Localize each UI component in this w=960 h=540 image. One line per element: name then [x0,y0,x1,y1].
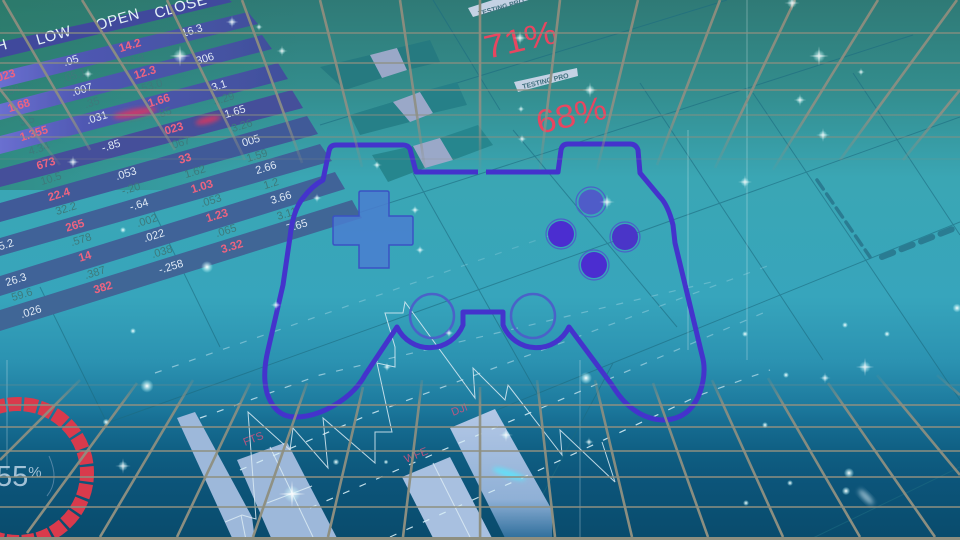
panel: top progress bars [320,40,493,182]
white values: 3.66 [269,189,293,207]
white values: .022 [142,227,166,245]
red values: 14.2 [118,37,143,55]
dim values: .065 [214,222,238,240]
dim values: .002 [135,212,159,230]
bar highlight [492,465,526,483]
d-pad [333,191,413,268]
dim values: 3.5 [18,113,36,129]
table header: LOW [34,22,74,49]
gauge inner arc [47,456,54,496]
dim values: 1.59 [245,147,269,165]
dim values: 53.0 [140,77,164,95]
table rows [0,0,362,331]
dim values: 3.29 [212,90,236,108]
bar 1 [177,412,255,540]
red values: 1.68 [7,97,32,115]
button top [576,187,606,217]
bar 3 [402,457,492,538]
chart: zigzag line [225,302,615,540]
table header [0,0,209,55]
white values: -.258 [157,258,185,277]
red values: 1.03 [190,178,215,196]
white values: 3.1 [210,78,228,94]
progress bar 1 [320,40,440,90]
dim values: .038 [150,243,174,261]
white values: .05 [62,53,80,69]
faint vertical lines [7,0,747,540]
white values: 005 [241,133,262,150]
stat: 68 percent: 68% [533,90,610,141]
progress bar 3 [372,125,493,182]
red values: 023 [163,121,185,138]
progress bar 2 [350,82,467,135]
red glow streaks [113,105,221,127]
dim values: .053 [199,192,223,210]
white values: .026 [19,303,43,321]
red values: 3.32 [220,238,245,256]
bar labels: WFE [403,445,430,466]
red values: 265 [64,217,87,235]
dim values [1,52,299,304]
white values: .007 [70,81,94,99]
dim values: 18.3 [122,52,146,70]
dim values: .387 [83,264,107,282]
white values: 1.65 [223,103,247,121]
red values [0,37,245,297]
dim values: 1.2 [262,176,280,192]
label: testing pro lower: TESTING PRO [522,73,570,91]
red values: 382 [92,280,114,297]
white values: 16.3 [180,22,204,40]
dim values: 1.62 [183,163,207,181]
red values: 1.23 [205,207,230,225]
dim values: .35 [83,95,101,111]
dim values: -.20 [120,181,142,198]
dim values: 59.6 [10,286,34,304]
left thumbstick [410,294,454,338]
red values: 22.4 [47,186,72,204]
red values: 33 [177,152,193,167]
gauge: red dashed ring [0,404,87,540]
stat: 71 percent: 71% [480,14,561,66]
dim values: 3.11 [276,205,299,223]
perspective grid: upper rays [0,0,960,170]
label: testing pro lower [514,68,578,92]
dim values: 334 [1,83,22,100]
white values: 2.66 [254,159,278,177]
bar labels: FTS [242,430,265,449]
red values: 1.66 [147,92,172,110]
red values: 673 [35,156,57,173]
dim values: 3.26 [230,117,254,135]
red values: 1.355 [19,124,50,144]
white values: -.85 [100,138,122,155]
dim values: 4.34 [27,140,51,158]
dim values: .85 [155,105,173,121]
chart: bottom bars [177,401,552,540]
controller outline [265,144,704,420]
white values: 26.3 [4,271,28,289]
dim values: 32.2 [54,200,78,218]
button left [546,219,576,249]
white values: .053 [114,165,138,183]
dim values: .578 [69,231,93,249]
dim values: 10.5 [39,170,63,188]
gauge: percent [0,461,42,493]
dim values: 067 [171,135,192,152]
thick dashed chart axis [817,180,960,257]
icon: game controller [265,144,704,420]
white values: .031 [85,109,109,127]
button bottom [579,250,609,280]
white values [0,22,309,321]
right thumbstick [511,294,555,338]
gauge: percent: % [28,464,42,481]
table header: OPEN [94,5,142,34]
perspective grid: lower rays [0,375,960,537]
bar 2 [237,442,338,540]
white values: -.64 [128,197,150,214]
bar 4 [450,409,552,538]
bar labels [242,401,469,466]
white values: 7.65 [285,217,309,235]
bar labels: DJI [450,401,469,419]
dim values: .05.1 [61,67,88,85]
white values: 306 [195,51,216,68]
chart: dashed trend lines [155,232,770,537]
red values: 12.3 [133,64,158,82]
panel: financial data table [0,0,362,331]
button right [610,222,640,252]
red values: 14 [77,249,94,265]
